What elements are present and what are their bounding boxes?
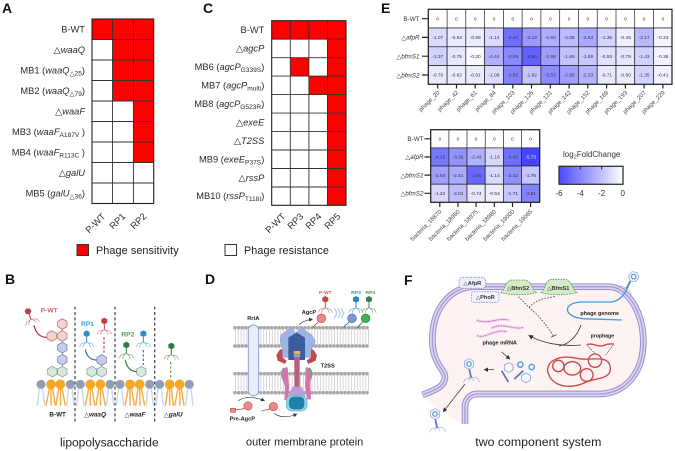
heatmap values: bacterial genes: -2.01 xyxy=(453,191,464,197)
heatmap values: phage genes: -3.53 xyxy=(545,73,556,79)
heatmap column labels: bacterial genes: bacteria_18980 xyxy=(464,209,498,243)
panel label D: D xyxy=(205,271,215,287)
protein: AgcP and variants: AgcP xyxy=(302,310,316,316)
heatmap values: phage genes: 0 xyxy=(586,16,589,22)
heatmap values: phage genes: 0 xyxy=(568,16,571,22)
phage: RP2 binding: RP2 xyxy=(121,331,135,338)
protein: AgcP and variants xyxy=(299,310,370,328)
heatmap values: phage genes: -0.64 xyxy=(451,35,462,41)
heatmap values: phage genes: 0 xyxy=(549,16,552,22)
heatmap column labels: bacterial genes: bacteria_19000 xyxy=(483,209,517,243)
column labels C: P-WT xyxy=(264,211,288,235)
row labels A: MB5 (galU xyxy=(26,188,69,198)
heatmap values: bacterial genes: -3.42 xyxy=(507,173,518,179)
panel label B: B xyxy=(5,271,15,287)
heatmap column labels: phage genes: phage_193 xyxy=(604,90,630,116)
prophage and chromosome: prophage xyxy=(591,333,614,339)
phages above membrane: RP4 xyxy=(365,290,375,296)
panel C: phage sensitivity matrix xyxy=(194,21,346,235)
row labels A: △25 xyxy=(69,70,82,78)
heatmap values: phage genes: -2.95 xyxy=(564,73,575,79)
bacterial cell envelope xyxy=(422,287,643,424)
heatmap cells: phage genes xyxy=(422,9,672,88)
heatmap values: bacterial genes: -1.16 xyxy=(489,155,500,161)
heatmap column labels: bacterial genes xyxy=(410,209,535,243)
heatmap values: phage genes: -3.13 xyxy=(526,35,537,41)
column labels A xyxy=(84,211,148,235)
heatmap values: bacterial genes: -4.15 xyxy=(434,155,446,161)
heatmap values: phage genes: -0.70 xyxy=(432,73,443,79)
strain labels: △galU xyxy=(164,412,183,419)
heatmap values: bacterial genes: 0 xyxy=(529,136,532,142)
protein: PhoR xyxy=(472,292,499,302)
heatmap values: phage genes: -1.43 xyxy=(639,54,650,60)
protein: BfmS2: △BfmS2 xyxy=(507,286,529,292)
heatmap values: phage genes: -1.09 xyxy=(489,73,500,79)
colour scale legend: log xyxy=(563,150,574,159)
row labels C: MB10 (rssP xyxy=(196,191,245,201)
row labels C: MB9 (exeE xyxy=(199,154,245,164)
colour scale legend: 2 xyxy=(574,154,577,160)
heatmap column labels: bacterial genes: bacteria_18975 xyxy=(446,209,480,243)
heatmap column labels: phage genes: phage_42 xyxy=(437,90,461,113)
row labels C: G523R xyxy=(240,104,261,111)
protein: Pre-AgcP xyxy=(230,397,297,422)
heatmap values: phage genes: 0 xyxy=(530,16,533,22)
row labels A: MB4 (waaF xyxy=(12,148,59,158)
row labels C: △agcP xyxy=(236,44,265,54)
row labels A: MB2 (waaQ xyxy=(20,86,69,96)
heatmap column labels: phage genes: phage_61 xyxy=(456,90,479,113)
heatmap column labels: phage genes: phage_131 xyxy=(529,90,554,116)
heatmap values: bacterial genes: -1.71 xyxy=(507,191,518,197)
heatmap row labels: phage genes: △afpR xyxy=(401,35,420,42)
row labels C: B-WT xyxy=(241,25,265,35)
row labels C: △rssP xyxy=(239,173,265,183)
heatmap column labels: bacterial genes: bacteria_19065 xyxy=(501,209,535,243)
panel label A: A xyxy=(2,0,12,16)
phage mRNA: phage mRNA xyxy=(482,341,517,347)
heatmap values: phage genes: -2.44 xyxy=(489,54,500,60)
released phage xyxy=(429,409,446,433)
heatmap values: phage genes: 0 xyxy=(436,16,439,22)
heatmap values: phage genes: -0.33 xyxy=(657,35,669,41)
colour scale legend: -6 xyxy=(555,189,563,198)
strain labels xyxy=(49,412,183,419)
heatmap column labels: phage genes: phage_169 xyxy=(585,90,611,116)
protein: BfmS1 xyxy=(541,279,577,295)
heatmap values: bacterial genes: 0 xyxy=(493,136,496,142)
phage assembly parts xyxy=(502,362,534,383)
protein: AfpR xyxy=(459,277,486,288)
heatmap column labels: phage genes: phage_20 xyxy=(418,90,442,113)
phage: RP2 binding xyxy=(119,331,137,372)
heatmap values: phage genes: -1.07 xyxy=(432,35,443,41)
phage: P-WT binding xyxy=(20,306,58,337)
prophage and chromosome xyxy=(548,333,614,386)
heatmap values: phage genes: -0.41 xyxy=(657,73,669,79)
matrix grid A xyxy=(92,19,154,204)
phages above membrane: RP3 xyxy=(351,290,361,296)
column labels C: RP3 xyxy=(286,211,305,231)
row labels A: △36 xyxy=(69,194,82,200)
colour scale legend: FoldChange xyxy=(577,150,621,159)
heatmap values: phage genes: -3.82 xyxy=(507,73,519,79)
phage: RP2 blocked xyxy=(164,343,179,378)
column labels A: RP1 xyxy=(108,211,127,231)
protein: RrtA xyxy=(247,316,259,396)
heatmap values: bacterial genes: -1.22 xyxy=(434,191,446,197)
row labels C: P37S xyxy=(245,159,262,166)
heatmap values: bacterial genes: -1.14 xyxy=(489,173,500,179)
heatmap values: phage genes: -0.75 xyxy=(451,54,462,60)
row labels C: △exeE xyxy=(236,117,265,127)
heatmap values: phage genes: -2.64 xyxy=(582,35,594,41)
heatmap values: bacterial genes: 0 xyxy=(438,136,441,142)
heatmap values: bacterial genes: -3.32 xyxy=(453,155,464,161)
heatmap values: phage genes: -3.59 xyxy=(507,54,519,60)
inhibition signal lines xyxy=(518,297,556,337)
row labels A: A187V xyxy=(60,132,80,139)
heatmap values: phage genes: 0 xyxy=(605,16,608,22)
colour scale legend xyxy=(555,150,625,198)
heatmap row labels: phage genes xyxy=(396,16,420,79)
row labels A xyxy=(12,24,86,200)
panel D: outer membrane protein diagram xyxy=(230,290,376,449)
heatmap values: bacterial genes: 0 xyxy=(457,136,460,142)
protein: Pre-AgcP: Pre-AgcP xyxy=(230,416,255,422)
heatmap values: bacterial genes: -3.81 xyxy=(525,191,536,197)
row labels C: MB8 (agcP xyxy=(194,99,240,109)
protein: PhoR: △PhoR xyxy=(476,295,495,301)
column labels A: P-WT xyxy=(84,211,108,235)
heatmap values: bacterial genes: -2.61 xyxy=(453,173,464,179)
chevrons xyxy=(334,308,344,318)
phage genome xyxy=(567,282,630,320)
heatmap values: phage genes xyxy=(432,16,669,79)
row labels A: ) xyxy=(82,66,85,76)
heatmap values: bacterial genes: -2.43 xyxy=(471,155,482,161)
row labels A: △waaF xyxy=(55,106,86,116)
heatmap column labels: phage genes: phage_126 xyxy=(510,90,536,116)
heatmap values: phage genes: 0 xyxy=(662,16,665,22)
column labels A: RP2 xyxy=(129,211,148,231)
row labels C: ) xyxy=(261,62,264,72)
phage: P-WT blocked xyxy=(97,318,112,353)
heatmap row labels: bacterial genes: △afpR xyxy=(405,154,424,161)
protein: BfmS1: △BfmS1 xyxy=(547,286,569,292)
row labels C: MB6 (agcP xyxy=(195,62,241,72)
heatmap values: bacterial genes: -4.60 xyxy=(471,173,482,179)
panel B: lipopolysaccharide diagram xyxy=(20,306,194,450)
colour scale legend: -2 xyxy=(598,189,606,198)
panel F: two component system diagram xyxy=(422,269,645,449)
heatmap values: phage genes: -1.14 xyxy=(489,35,500,41)
phage: P-WT binding: P-WT xyxy=(41,307,58,314)
heatmap values: bacterial genes: -0.74 xyxy=(471,191,482,197)
row labels C: T118I xyxy=(245,196,261,203)
heatmap values: bacterial genes: -2.94 xyxy=(434,173,446,179)
row labels A: ) xyxy=(79,127,85,137)
row labels C: G339S xyxy=(241,67,262,74)
colour scale legend: 0 xyxy=(620,189,625,198)
protein: BfmS2 xyxy=(501,280,536,295)
membrane heads xyxy=(36,380,194,389)
heatmap values: phage genes: -1.82 xyxy=(526,73,537,79)
row labels C xyxy=(194,25,265,203)
column labels C: RP5 xyxy=(323,211,342,231)
heatmap values: phage genes: -0.20 xyxy=(470,54,481,60)
heatmap values: bacterial genes: -4.43 xyxy=(507,155,518,161)
row labels C: ) xyxy=(261,154,264,164)
row labels C: multi xyxy=(247,85,262,92)
heatmap values: bacterial genes: 0 xyxy=(511,136,514,142)
strain labels: △waaF xyxy=(125,412,145,419)
row labels C: ) xyxy=(261,99,264,109)
strain labels: B-WT xyxy=(49,412,66,419)
panel label F: F xyxy=(404,272,413,288)
heatmap values: phage genes: -2.33 xyxy=(582,73,594,79)
panel E: phage gene heatmap xyxy=(396,9,672,116)
row labels C: MB7 (agcP xyxy=(201,80,247,90)
heatmap values: phage genes: -4.47 xyxy=(507,35,519,41)
heatmap row labels: bacterial genes: △bfmS2 xyxy=(400,190,424,198)
heatmap values: bacterial genes: -0.54 xyxy=(489,191,500,197)
heatmap values: phage genes: -2.98 xyxy=(545,54,556,60)
heatmap values: bacterial genes: 0 xyxy=(475,136,478,142)
heatmap values: phage genes: 0 xyxy=(643,16,646,22)
heatmap values: phage genes: -1.69 xyxy=(582,54,594,60)
caption B: lipopolysaccharide xyxy=(60,436,159,450)
heatmap column labels: phage genes: phage_207 xyxy=(622,90,648,116)
phages above membrane xyxy=(318,290,376,313)
row labels A: R113C xyxy=(59,152,80,160)
phages above membrane: P-WT xyxy=(319,290,332,296)
phage mRNA xyxy=(477,319,523,347)
protein: T2SS secretion system xyxy=(276,327,335,411)
panel A: phage sensitivity matrix xyxy=(12,19,154,235)
panel E: bacterial gene heatmap xyxy=(400,130,540,243)
heatmap values: phage genes: -1.35 xyxy=(639,73,650,79)
column labels C xyxy=(264,211,342,235)
heatmap cells: bacterial genes xyxy=(424,130,540,207)
heatmap values: phage genes: -0.79 xyxy=(620,54,631,60)
transcription arrows xyxy=(529,325,581,346)
heatmap values: phage genes: 0 xyxy=(624,16,627,22)
dashed separators xyxy=(75,307,155,422)
heatmap values: phage genes: -2.06 xyxy=(564,35,575,41)
heatmap values: phage genes: -4.86 xyxy=(526,54,537,60)
heatmap values: phage genes: -0.59 xyxy=(470,35,481,41)
heatmap values: phage genes: 0 xyxy=(455,16,458,22)
heatmap row labels: bacterial genes: △bfmS1 xyxy=(400,172,424,179)
protein: T2SS secretion system: T2SS xyxy=(321,363,335,369)
heatmap row labels: phage genes: △bfmS1 xyxy=(396,54,420,60)
row labels A: △waaQ xyxy=(54,45,85,55)
phage genome: phage genome xyxy=(580,311,619,317)
row labels A: △79 xyxy=(69,91,82,98)
heatmap row labels: phage genes: △bfmS2 xyxy=(396,72,420,79)
heatmap values: phage genes: -1.89 xyxy=(564,54,575,60)
protein: AfpR: △AfpR xyxy=(463,281,481,287)
heatmap values: phage genes: 0 xyxy=(511,16,514,22)
legend: phage resistance: Phage resistance xyxy=(244,245,329,257)
heatmap row labels: bacterial genes xyxy=(400,136,424,198)
row labels A: ) xyxy=(79,148,85,158)
row labels A: ) xyxy=(82,188,85,198)
lipid bilayers xyxy=(235,328,371,393)
sugar chains xyxy=(47,319,146,377)
heatmap column labels: phage genes xyxy=(418,90,667,116)
heatmap values: phage genes: -0.62 xyxy=(451,73,462,79)
heatmap values: phage genes: 0 xyxy=(493,16,496,22)
legend: phage sensitivity: Phage sensitivity xyxy=(96,245,179,257)
infecting phage xyxy=(617,269,645,298)
strain labels: △waaQ xyxy=(84,412,106,419)
heatmap values: phage genes: -0.71 xyxy=(601,73,612,79)
heatmap values: phage genes: -0.93 xyxy=(601,54,612,60)
heatmap values: phage genes: -2.50 xyxy=(545,35,556,41)
heatmap column labels: phage genes: phage_142 xyxy=(547,90,573,116)
legend xyxy=(77,244,329,257)
heatmap values: bacterial genes xyxy=(434,136,536,197)
row labels C: △T2SS xyxy=(234,136,265,146)
row labels C: ) xyxy=(261,80,264,90)
heatmap column labels: phage genes: phage_152 xyxy=(566,90,592,116)
panel label C: C xyxy=(203,0,213,16)
heatmap column labels: phage genes: phage_84 xyxy=(475,90,498,113)
heatmap values: bacterial genes: -1.76 xyxy=(525,173,536,179)
row labels A: B-WT xyxy=(61,24,85,34)
heatmap column labels: phage genes: phage_229 xyxy=(641,90,667,116)
heatmap column labels: bacterial genes: bacteria_18870 xyxy=(410,209,444,243)
heatmap column labels: bacterial genes: bacteria_18960 xyxy=(428,209,462,243)
row labels A: ) xyxy=(82,86,85,96)
heatmap column labels: phage genes: phage_103 xyxy=(491,90,517,116)
lipid tails xyxy=(37,388,193,406)
row labels A: MB3 (waaF xyxy=(12,127,60,137)
heatmap values: phage genes: -0.61 xyxy=(470,73,481,79)
heatmap values: phage genes: -0.60 xyxy=(620,73,631,79)
colour scale legend: -4 xyxy=(577,189,584,198)
assembly arrows xyxy=(443,352,510,412)
caption F: two component system xyxy=(475,435,601,449)
heatmap row labels: phage genes: B-WT xyxy=(403,16,420,23)
heatmap values: phage genes: -0.49 xyxy=(620,35,631,41)
phage: RP1 blocked xyxy=(136,330,151,365)
row labels A: MB1 (waaQ xyxy=(20,66,69,76)
heatmap values: phage genes: -1.35 xyxy=(601,35,612,41)
heatmap values: phage genes: -0.38 xyxy=(657,54,669,60)
heatmap values: phage genes: 0 xyxy=(474,16,477,22)
heatmap values: phage genes: -2.17 xyxy=(639,35,650,41)
row labels C: ) xyxy=(261,191,264,201)
heatmap row labels: bacterial genes: B-WT xyxy=(407,136,424,143)
heatmap values: phage genes: -1.37 xyxy=(432,54,443,60)
phage: RP1 binding xyxy=(79,321,97,360)
column labels C: RP4 xyxy=(304,211,323,231)
heatmap values: bacterial genes: -5.73 xyxy=(525,155,536,161)
phage: RP1 binding: RP1 xyxy=(81,321,94,328)
panel label E: E xyxy=(381,0,390,16)
matrix grid C xyxy=(272,21,346,205)
row labels A: △galU xyxy=(59,168,85,178)
protein: RrtA: RrtA xyxy=(247,316,259,322)
caption D: outer membrane protein xyxy=(246,437,363,449)
assembled phage xyxy=(463,359,480,383)
